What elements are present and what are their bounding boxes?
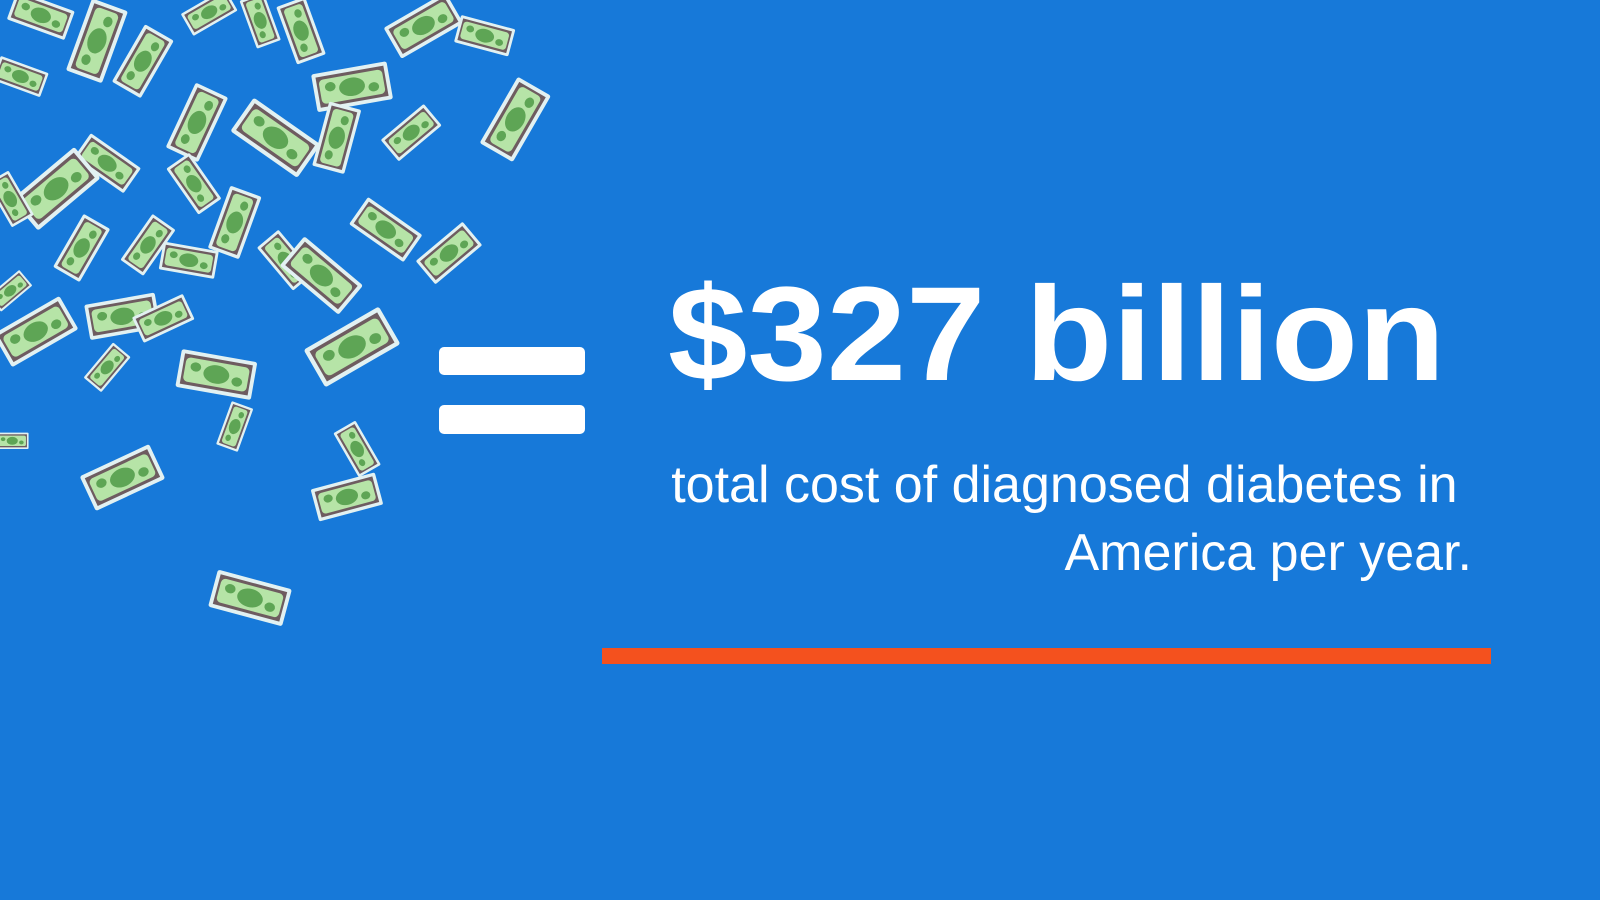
equals sign [439, 347, 585, 434]
subtitle text [671, 456, 1472, 582]
subtitle text: America per year. [1064, 524, 1472, 582]
subtitle text: total cost of diagnosed diabetes in [671, 456, 1458, 514]
orange underline bar [602, 648, 1491, 664]
headline: $327 billion: $327 billion [668, 260, 1445, 409]
